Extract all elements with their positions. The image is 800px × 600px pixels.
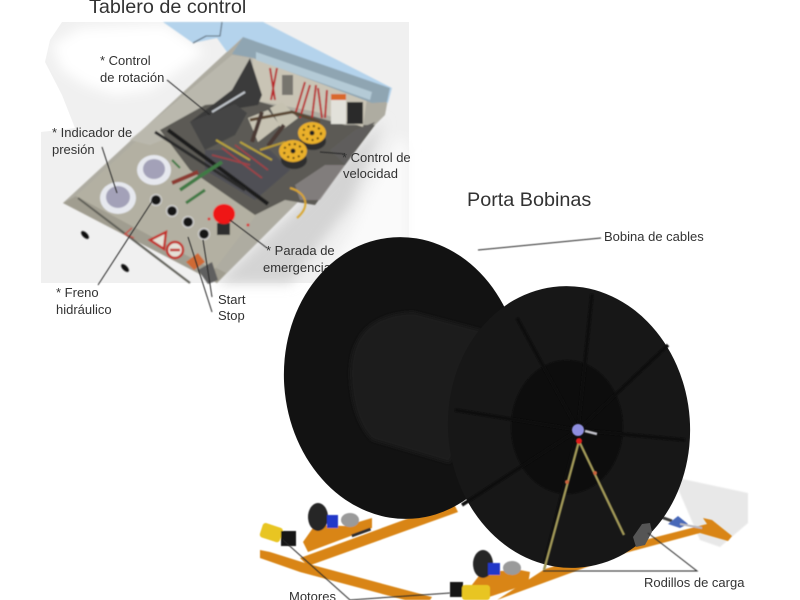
title: porta bobinas: Porta Bobinas xyxy=(467,189,591,211)
frame xyxy=(259,502,732,600)
label: parada de emergencia: emergencia xyxy=(263,260,332,275)
label: indicador de presión: presión xyxy=(52,142,95,157)
panel stripes xyxy=(78,130,305,283)
front flange xyxy=(438,278,700,576)
label: control de velocidad: velocidad xyxy=(343,166,398,181)
icon: lid xyxy=(163,22,392,103)
label: freno hidráulico: hidráulico xyxy=(56,302,112,317)
back wall xyxy=(253,58,367,127)
label: control de rotación: * Control xyxy=(100,53,151,68)
label: rodillos de carga: Rodillos de carga xyxy=(644,575,745,590)
module xyxy=(331,94,363,124)
floor of box with components xyxy=(160,100,375,215)
icon: pressure gauges xyxy=(100,155,171,214)
interior parts xyxy=(205,102,375,200)
leader lines xyxy=(283,238,697,600)
icon: velocity dials xyxy=(279,122,326,169)
label: bobina de cables: Bobina de cables xyxy=(604,229,704,244)
label: parada de emergencia: * Parada de xyxy=(266,243,335,258)
rollers left xyxy=(303,503,372,552)
drum xyxy=(350,312,500,463)
label: control de rotación: de rotación xyxy=(100,70,164,85)
label: start: Start xyxy=(218,292,246,307)
icon: emergency stop xyxy=(208,204,250,235)
icon: knobs xyxy=(150,194,210,240)
label: control de velocidad: * Control de xyxy=(342,150,411,165)
floor shadow xyxy=(673,477,748,547)
image background xyxy=(41,22,409,283)
motors xyxy=(259,522,490,600)
leader lines xyxy=(98,80,345,312)
dark support xyxy=(190,58,262,122)
label: stop: Stop xyxy=(218,308,245,323)
wiring back wall xyxy=(270,68,327,118)
label: indicador de presión: * Indicador de xyxy=(52,125,132,140)
panel: tablero de control xyxy=(41,22,409,312)
panel: porta bobinas xyxy=(259,229,748,600)
control box xyxy=(63,22,392,284)
load roller detail xyxy=(633,523,652,547)
label: freno hidráulico: * Freno xyxy=(56,285,99,300)
icon: warning signs xyxy=(150,232,183,258)
rear flange xyxy=(274,229,532,527)
hub and straps xyxy=(544,424,624,570)
rollers right xyxy=(468,550,530,600)
